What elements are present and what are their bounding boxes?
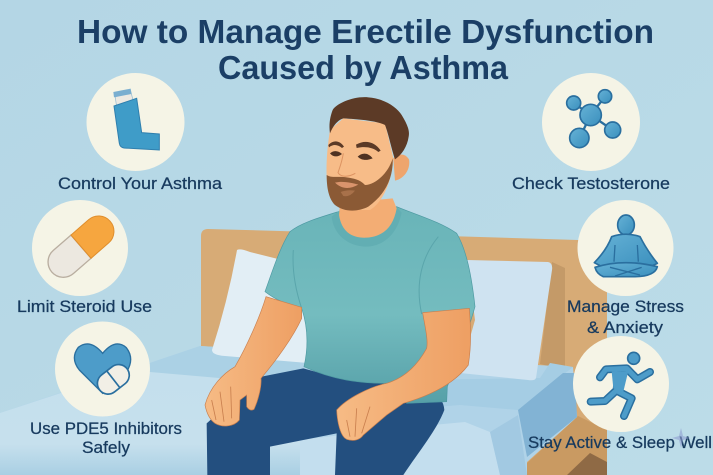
shirt (265, 207, 475, 403)
item: manage stress and anxiety (567, 200, 684, 337)
left arm and hand (205, 297, 302, 426)
item: use pde5 inhibitors safely (30, 322, 182, 457)
mouth (335, 182, 358, 188)
chin patch (341, 190, 355, 196)
icon: meditating figure (594, 215, 657, 277)
head (326, 97, 409, 211)
headboard (201, 229, 607, 475)
right arm and hand (337, 308, 471, 440)
icon: capsule (42, 210, 120, 284)
icon: molecule (567, 90, 621, 148)
sheet fold (490, 415, 527, 475)
label: Check Testosterone (512, 175, 670, 193)
runner torso (612, 371, 628, 392)
sheet side panel (518, 373, 577, 457)
neck (339, 198, 397, 238)
mattress top right (400, 363, 573, 410)
bed frame corner (525, 416, 607, 475)
mattress back band (0, 346, 300, 413)
sleeve seams (293, 237, 438, 314)
eyes (330, 151, 373, 160)
mattress base (0, 346, 577, 475)
label: Safely (82, 439, 131, 457)
left pillow (212, 249, 312, 363)
item: stay active and sleep well (528, 336, 712, 452)
body (205, 198, 475, 475)
icon: inhaler (113, 89, 159, 150)
label: Stay Active & Sleep Well (528, 434, 712, 452)
label: Control Your Asthma (58, 175, 223, 193)
item: limit steroid use (17, 200, 152, 316)
nose (338, 153, 355, 176)
hair (329, 97, 409, 159)
label: Limit Steroid Use (17, 298, 152, 316)
label (30, 420, 182, 457)
item: check testosterone (512, 73, 670, 193)
mattress top left (0, 372, 300, 475)
right pillow (460, 260, 552, 380)
watermark sparkle (672, 428, 690, 448)
beard (327, 158, 393, 211)
collar (332, 207, 402, 247)
bed (0, 229, 607, 475)
label: Use PDE5 Inhibitors (30, 420, 182, 438)
jeans (207, 368, 444, 475)
icon: heart with pill (74, 344, 134, 398)
runner outline (591, 368, 650, 416)
title: How to Manage Erectile Dysfunction (77, 13, 654, 50)
wood shadow behind pillow (540, 262, 565, 370)
face (326, 118, 393, 210)
item: control your asthma (58, 73, 223, 193)
knuckle lines (212, 387, 370, 437)
eyebrows (328, 141, 381, 152)
icon: running figure (591, 352, 650, 416)
man (205, 97, 475, 475)
title (77, 13, 654, 86)
ear (393, 154, 409, 181)
label: Manage Stress (567, 298, 684, 316)
label: & Anxiety (587, 319, 664, 337)
title: Caused by Asthma (218, 49, 509, 86)
lower sheet (300, 422, 500, 475)
label (567, 298, 684, 337)
